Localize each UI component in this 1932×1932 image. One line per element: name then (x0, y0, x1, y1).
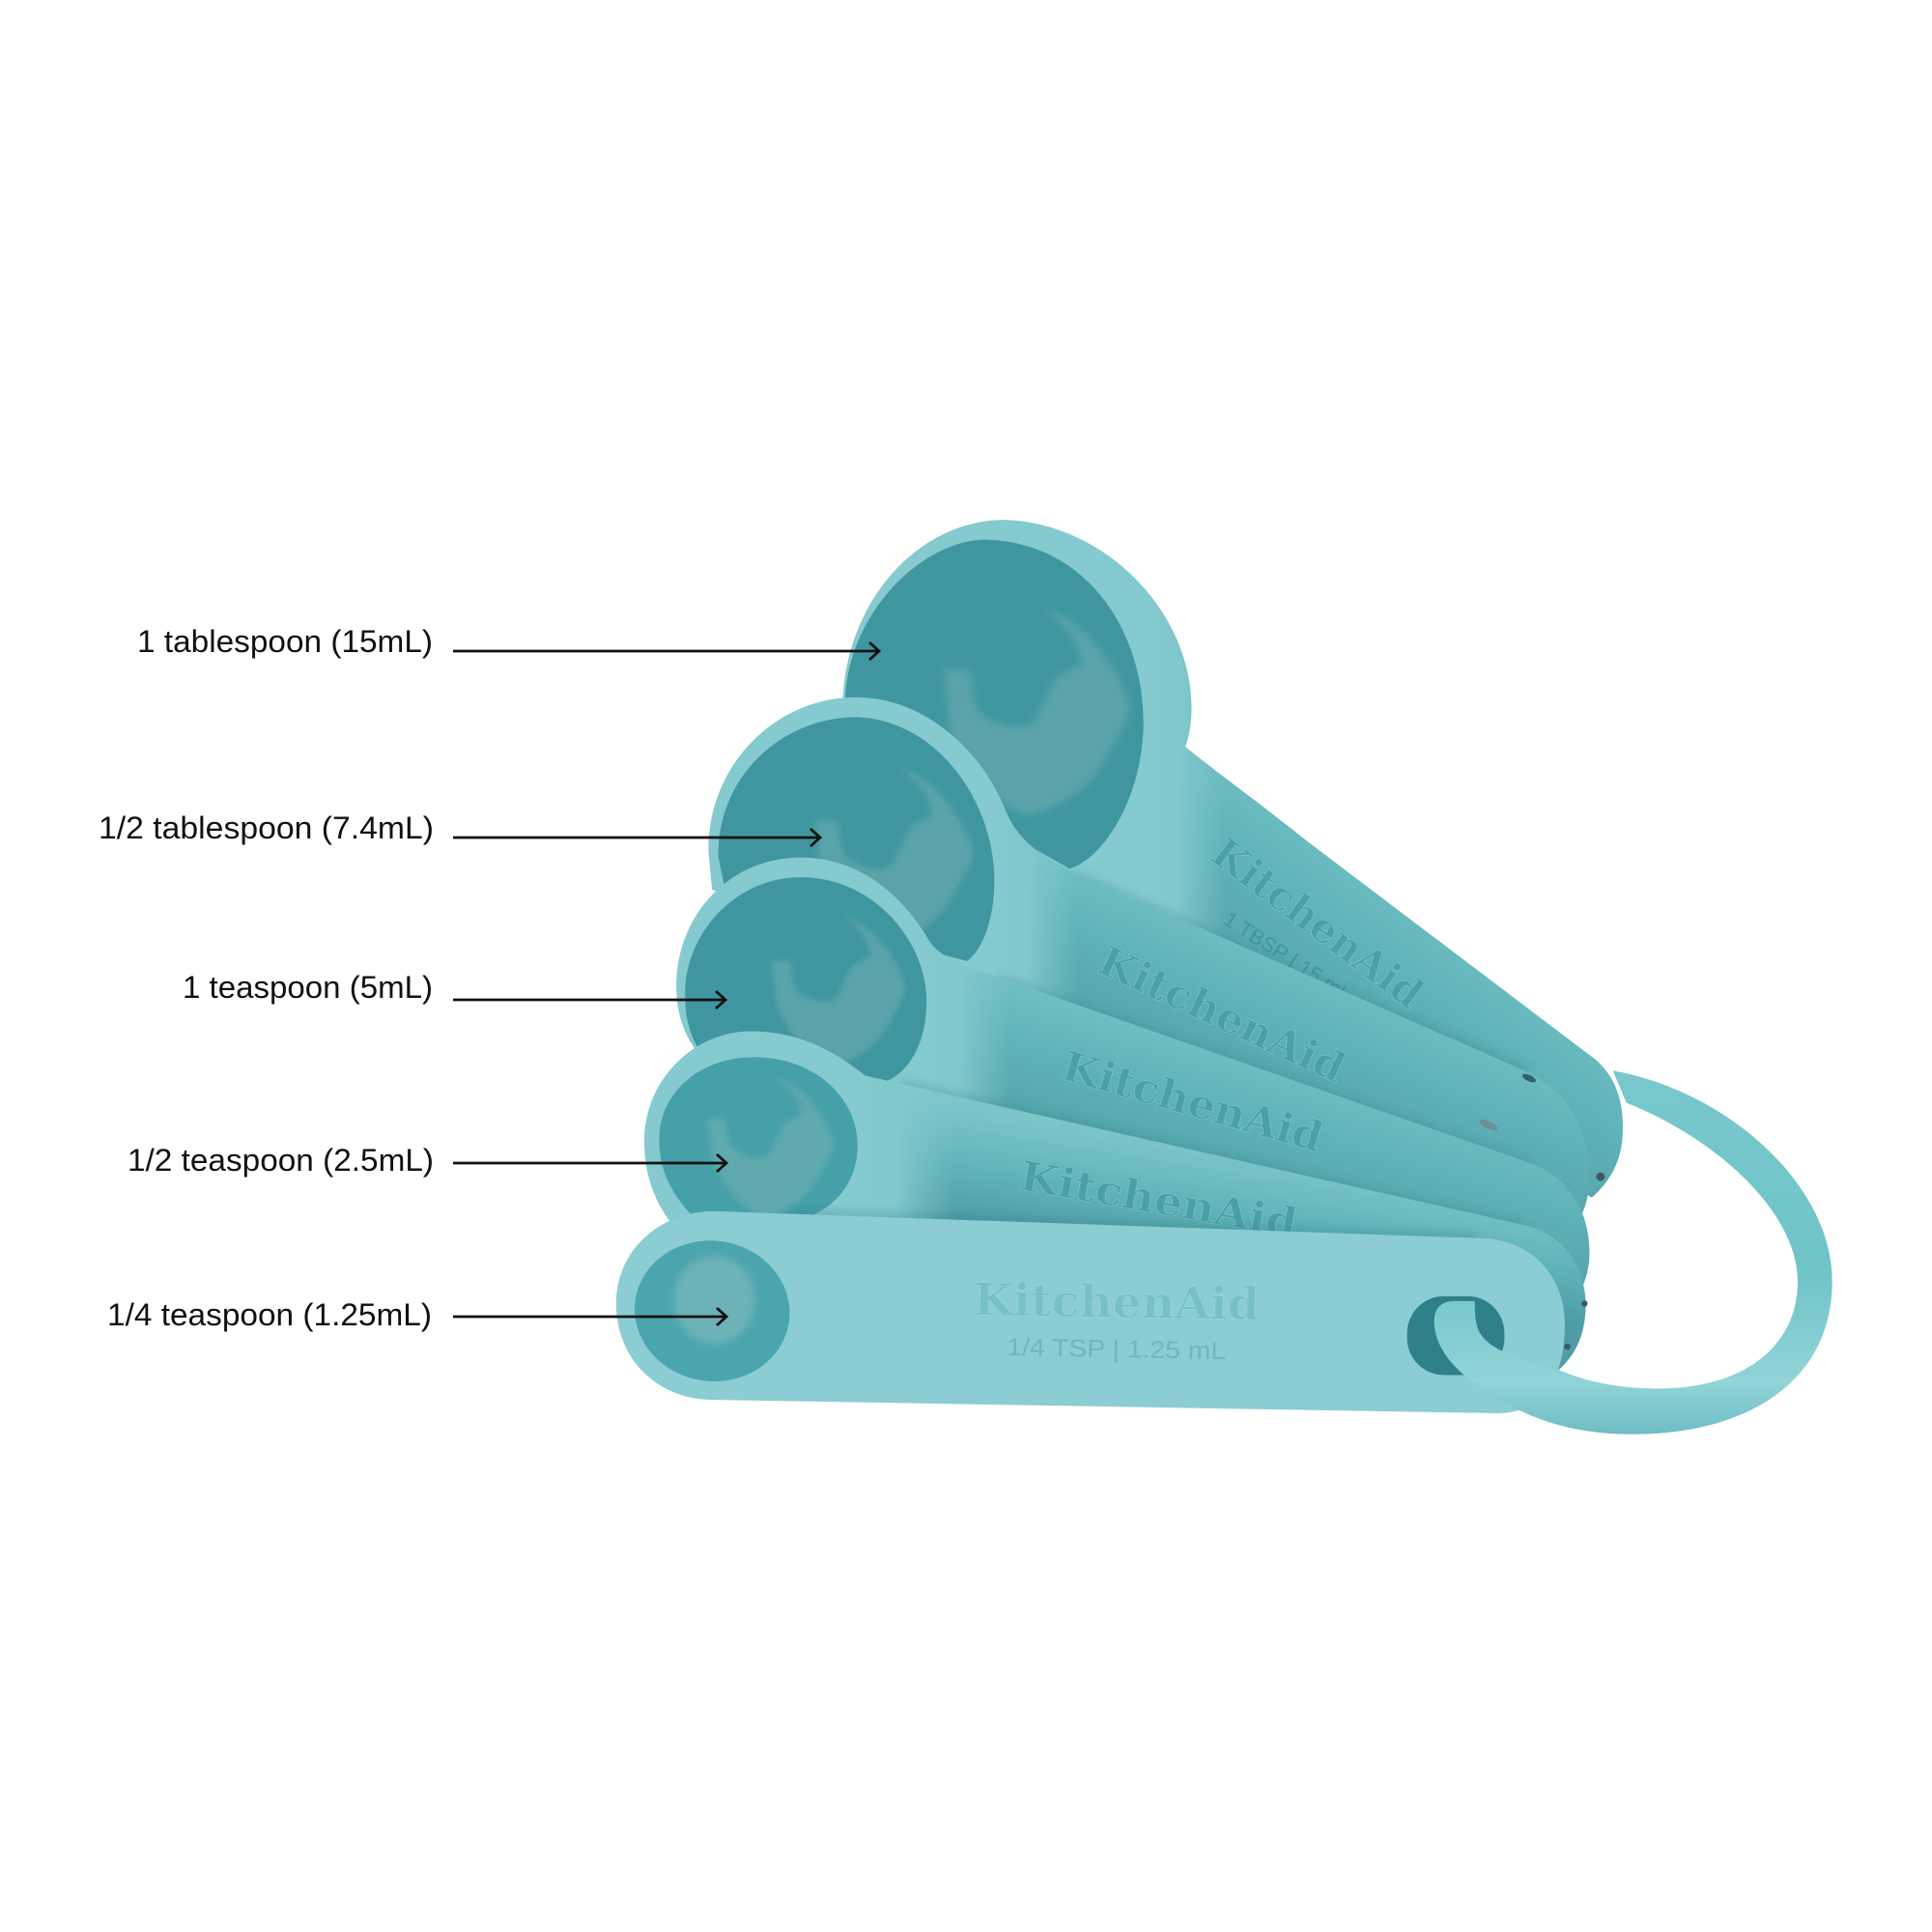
label: 1 tablespoon: 1 tablespoon (15mL) (137, 624, 433, 659)
capacity marking: 1 TBSP | 15 mL (1220, 907, 1356, 1007)
bowl interior (626, 1231, 799, 1391)
bowl highlight (772, 917, 906, 1065)
spoon body (676, 858, 1589, 1312)
spoon: 1 teaspoon (676, 858, 1589, 1312)
arrow: 1/2 tablespoon (453, 829, 820, 846)
bowl highlight (707, 1077, 834, 1217)
embossed brand: KitchenAid (1203, 828, 1433, 1018)
capacity marking: 1/4 TSP | 1.25 mL (1007, 1334, 1226, 1365)
bowl highlight (674, 1256, 755, 1345)
bowl interior (685, 877, 926, 1084)
embossed brand: KitchenAid (1016, 1151, 1301, 1247)
label: 1/4 teaspoon: 1/4 teaspoon (1.25mL) (107, 1297, 432, 1332)
rim highlight (842, 520, 1623, 1198)
bowl highlight (944, 609, 1130, 814)
embossed brand: KitchenAid (973, 1273, 1260, 1330)
bowl interior (659, 1057, 858, 1220)
metal rivets (1478, 1072, 1605, 1350)
arrow: 1/4 teaspoon (453, 1308, 726, 1325)
spoon body (644, 1032, 1586, 1370)
label: 1/2 teaspoon: 1/2 teaspoon (2.5mL) (128, 1143, 434, 1178)
spoon body (842, 520, 1623, 1198)
illustration: stacked measuring spoons (616, 520, 1833, 1435)
bowl interior (719, 717, 994, 961)
rim highlight (644, 1032, 1586, 1370)
spoon body (616, 1211, 1565, 1413)
shadow under spoon edge (899, 1084, 1528, 1229)
label: 1 teaspoon: 1 teaspoon (5mL) (183, 970, 433, 1005)
bowl interior (845, 540, 1144, 868)
ring: back section (1435, 1070, 1833, 1435)
arrow: 1 teaspoon (453, 991, 725, 1009)
embossed brand: KitchenAid (1057, 1041, 1328, 1161)
shadow under spoon edge (1072, 875, 1528, 1072)
embossed brand: KitchenAid (1092, 936, 1353, 1093)
spoon: 1 tablespoon (842, 520, 1623, 1198)
spoon body (708, 697, 1589, 1238)
ring: front section through the hole (1434, 1300, 1651, 1435)
rim highlight (676, 858, 1589, 1312)
shadow under spoon edge (788, 1213, 1479, 1238)
shadow under spoon edge (998, 980, 1534, 1167)
rim highlight (708, 697, 1589, 1238)
label: 1/2 tablespoon: 1/2 tablespoon (7.4mL) (99, 810, 434, 845)
spoon: 1/2 tablespoon (708, 697, 1589, 1238)
spoon: 1/4 teaspoon flat front (616, 1211, 1565, 1413)
arrow: 1 tablespoon (453, 642, 879, 660)
bowl highlight (815, 769, 974, 944)
hanging hole (1407, 1296, 1504, 1375)
arrow: 1/2 teaspoon (453, 1154, 726, 1172)
spoon: 1/2 teaspoon (644, 1032, 1586, 1370)
